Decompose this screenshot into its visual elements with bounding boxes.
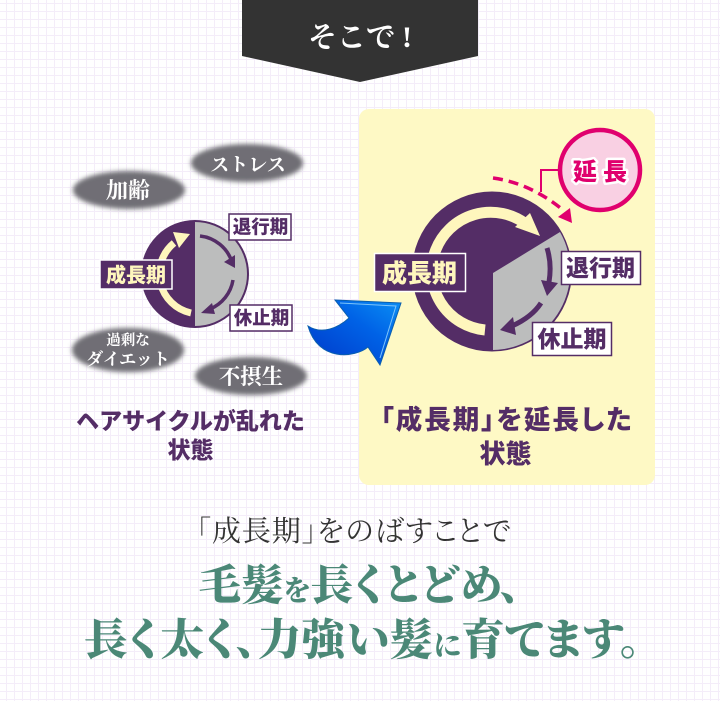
caption: extended growth phase: 状態 xyxy=(479,439,532,469)
cause bubble: 加齢: 加齢 xyxy=(106,178,150,203)
diagram: disturbed hair cycle xyxy=(100,214,292,331)
badge: 延長 xyxy=(560,130,640,210)
label: 成長期: 成長期 xyxy=(106,263,166,287)
banner: そこで!: ! xyxy=(402,21,412,54)
label: 成長期 xyxy=(100,260,172,289)
arrow: dashed extension xyxy=(493,170,572,223)
cause bubble: 過剰なダイエット xyxy=(72,328,184,372)
cause bubble: 加齢 xyxy=(73,171,185,209)
cause bubble: 過剰なダイエット: 過剰な xyxy=(106,332,150,349)
cause bubble: 不摂生: 不摂生 xyxy=(219,365,283,389)
label: 退行期: 退行期 xyxy=(566,255,635,281)
panel: extended growth phase xyxy=(359,109,655,485)
label: 成長期 xyxy=(374,254,466,292)
badge: 延長: 延長 xyxy=(573,159,633,186)
text: lead-in: 「成長期」をのばすことで xyxy=(197,515,511,548)
banner: そこで!: そこで xyxy=(308,22,395,54)
caption: disturbed hair cycle: 状態 xyxy=(168,437,214,463)
cause bubble: ストレス: ストレス xyxy=(210,155,286,176)
label: 休止期: 休止期 xyxy=(538,326,606,352)
headline xyxy=(84,563,642,665)
label: 退行期: 退行期 xyxy=(233,216,288,238)
label: 退行期 xyxy=(562,252,640,284)
caption: disturbed hair cycle xyxy=(76,408,305,463)
cause bubble: 過剰なダイエット: ダイエット xyxy=(86,350,170,369)
diagram: extended growth phase xyxy=(374,192,640,356)
caption: extended growth phase: 「成長期」を延長した xyxy=(380,405,634,435)
label: 成長期: 成長期 xyxy=(382,259,457,288)
arrow: growth cycle xyxy=(159,232,191,313)
arrow: blue xyxy=(308,300,401,365)
headline: 毛髪を長くとどめ、 xyxy=(198,563,522,610)
arrow: regression cycle xyxy=(200,236,233,309)
headline: 長く太く、力強い髪に育てます。 xyxy=(84,617,642,665)
arrow: regression cycle xyxy=(512,248,550,326)
badge: 延長: 延長 xyxy=(573,159,633,186)
banner: そこで! xyxy=(242,0,478,82)
label: 休止期 xyxy=(532,322,612,356)
cause bubble: 不摂生 xyxy=(195,357,307,395)
label: 休止期: 休止期 xyxy=(234,308,289,328)
caption: extended growth phase xyxy=(380,405,634,469)
arrow: extended growth cycle xyxy=(432,212,540,330)
cause bubble: ストレス xyxy=(191,144,303,182)
caption: disturbed hair cycle: ヘアサイクルが乱れた xyxy=(76,408,305,434)
